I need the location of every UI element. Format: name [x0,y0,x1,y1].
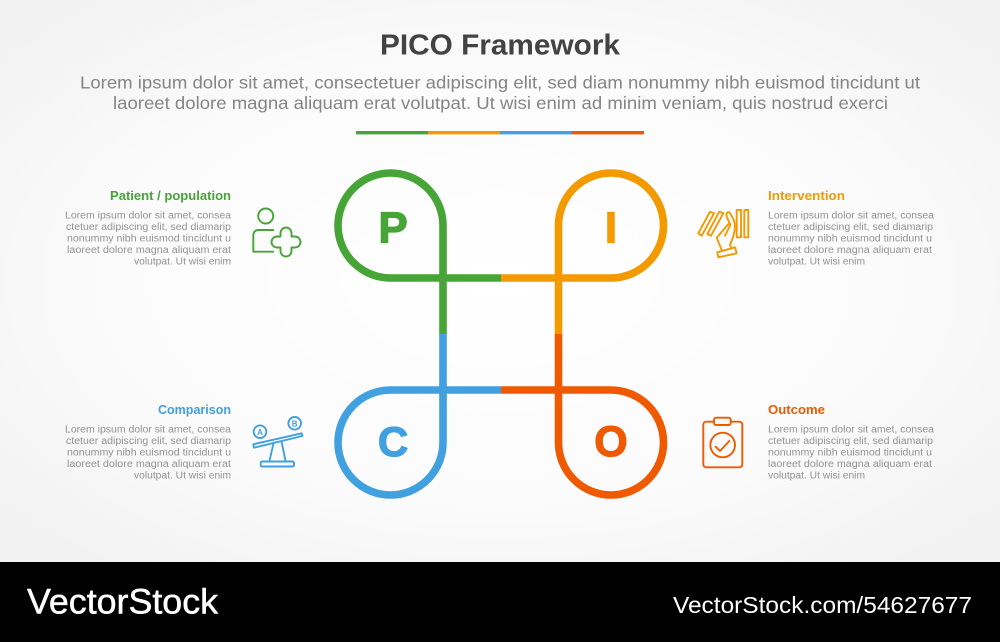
heading: outcome: Outcome [768,403,825,417]
body text: outcome: ctetuer adipiscing elit, sed diamarip [768,436,934,447]
panel: patient / population [65,189,232,268]
icon: balance scale A B: A [257,428,263,437]
body text: intervention: ctetuer adipiscing elit, sed diamarip [768,222,934,233]
PICO quadrant diagram [338,173,664,495]
body text: comparison: volutpat. Ut wisi enim [134,470,231,482]
body text: patient: Lorem ipsum dolor sit amet, consea [65,210,232,222]
subtitle text: laoreet dolore magna aliquam erat volutpat. Ut wisi enim ad minim veniam, quis nostrud exerci [113,93,888,113]
icon: balance scale A B: B [292,419,298,428]
panel: comparison [65,403,232,482]
body text: intervention: nonummy nibh euismod tincidunt u [768,234,932,244]
body text: patient: ctetuer adipiscing elit, sed diamarip [66,222,232,233]
body text: outcome: Lorem ipsum dolor sit amet, consea [768,424,935,436]
footer logo: VectorStock [27,582,219,621]
body text: intervention: Lorem ipsum dolor sit amet, consea [768,210,935,222]
four-colour divider [356,131,644,134]
icon: hand with bars [698,210,748,257]
loop: P green [338,173,501,334]
body text: outcome: volutpat. Ut wisi enim [768,470,865,482]
heading: intervention: Intervention [768,189,845,203]
body text: comparison: laoreet dolore magna aliquam erat [67,459,231,470]
icon: balance scale A B [253,417,302,466]
subtitle text: Lorem ipsum dolor sit amet, consectetuer adipiscing elit, sed diam nonummy nibh euismod tincidunt ut [80,72,920,92]
body text: intervention [768,210,935,268]
loop: I orange [501,173,664,334]
body text: comparison [65,424,232,482]
letter I: I [605,204,617,253]
panel: outcome [768,403,935,482]
body text: patient: volutpat. Ut wisi enim [134,256,231,268]
body text: patient: nonummy nibh euismod tincidunt u [67,234,231,244]
panel: intervention [768,189,935,268]
letter P: P [378,204,408,253]
heading: comparison: Comparison [158,403,231,417]
letter C: C [378,418,408,465]
footer url: VectorStock.com/54627677 [673,592,972,618]
loop: C blue [338,334,501,495]
body text: outcome: nonummy nibh euismod tincidunt u [768,448,932,458]
body text: comparison: ctetuer adipiscing elit, sed diamarip [66,436,232,447]
body text: outcome [768,424,935,482]
body text: patient: laoreet dolore magna aliquam erat [67,245,231,256]
body text: outcome: laoreet dolore magna aliquam erat [768,459,932,470]
body text: intervention: laoreet dolore magna aliquam erat [768,245,932,256]
body text: comparison: Lorem ipsum dolor sit amet, consea [65,424,232,436]
title: PICO Framework [380,29,621,61]
heading: patient / population: Patient / population [110,189,231,203]
body text: patient [65,210,232,268]
body text: comparison: nonummy nibh euismod tincidunt u [67,448,231,458]
letter O: O [594,418,628,466]
subtitle text [80,72,920,113]
body text: intervention: volutpat. Ut wisi enim [768,256,865,268]
footer bar [0,562,1000,642]
icon: clipboard with check [703,418,742,467]
loop: O orange-red [501,334,664,495]
icon: patient with medical cross [253,208,300,256]
